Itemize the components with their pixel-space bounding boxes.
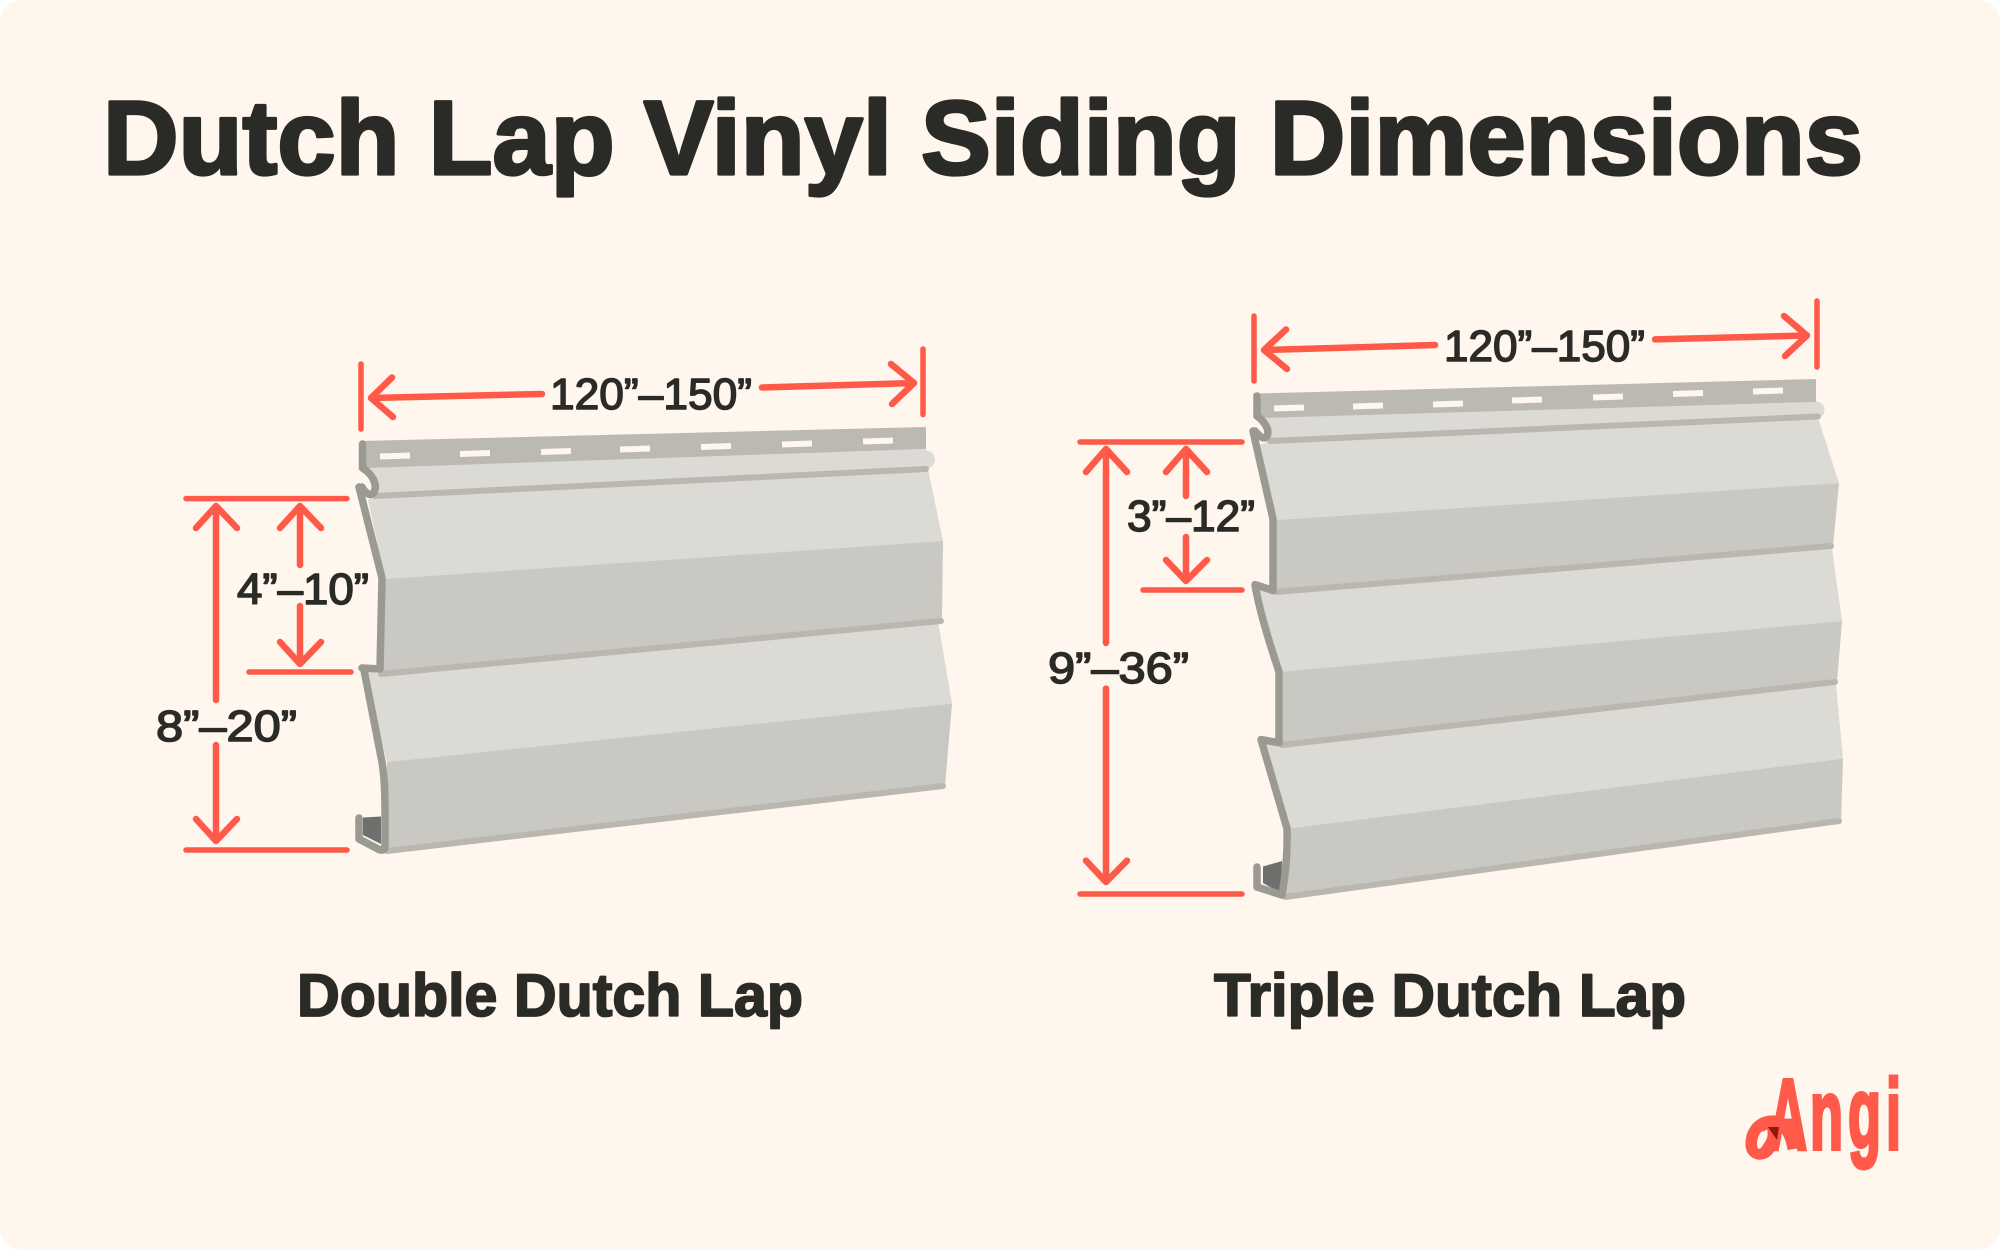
heading: double dutch lap: Double Dutch Lap (297, 962, 803, 1029)
logo: Angi: g (1848, 1057, 1881, 1169)
logo: Angi (1752, 1057, 1901, 1171)
logo: Angi: i (1886, 1059, 1901, 1171)
dimension: width 120–150: 120”–150” (1444, 322, 1645, 371)
panel: triple dutch lap (1048, 301, 1843, 1029)
dimension: height 8–20 (156, 499, 347, 850)
dimension: reveal 3–12: 3”–12” (1127, 492, 1255, 541)
dimension: height 8–20: 8”–20” (156, 702, 297, 751)
dimension: reveal 3–12 (1127, 449, 1255, 590)
dimension: width 120–150: 120”–150” (550, 370, 752, 419)
logo: Angi: A (1769, 1059, 1807, 1171)
dimension: width 120–150 (361, 349, 923, 429)
siding: triple dutch lap (1253, 379, 1843, 897)
siding: double dutch lap (359, 427, 952, 851)
logo: Angi: n (1810, 1059, 1843, 1171)
heading: triple dutch lap: Triple Dutch Lap (1214, 962, 1686, 1029)
dimension: reveal 4–10: 4”–10” (237, 565, 369, 614)
title: Dutch Lap Vinyl Siding Dimensions (103, 80, 1863, 197)
dimension: height 9–36: 9”–36” (1048, 644, 1189, 693)
dimension: width 120–150 (1254, 301, 1817, 381)
panel: double dutch lap (156, 349, 952, 1029)
dimension: height 9–36 (1048, 442, 1242, 894)
dimension: reveal 4–10 (237, 506, 369, 672)
